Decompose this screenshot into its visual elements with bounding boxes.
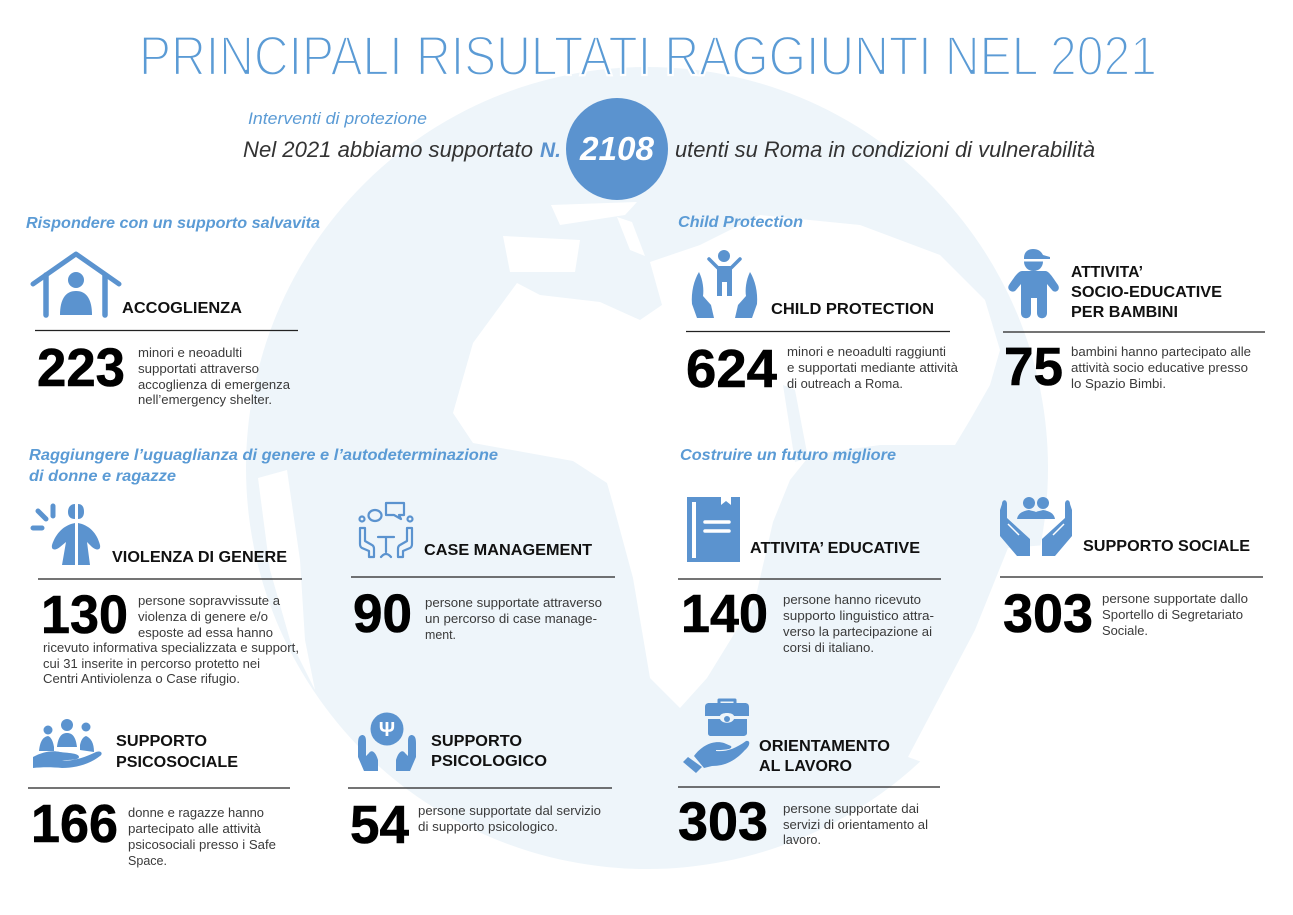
card: attività socio-educative: SOCIO-EDUCATIVE [1071, 284, 1222, 301]
card: violenza di genere [33, 504, 302, 686]
card: case management [351, 503, 615, 644]
headline statement with total: N. [540, 139, 561, 162]
card: accoglienza: accoglienza di emergenza [138, 378, 290, 392]
card: orientamento al lavoro: persone supportate dai [783, 802, 919, 816]
section heading: supporto salvavita: Rispondere con un supporto salvavita [26, 215, 320, 232]
card: orientamento al lavoro: lavoro. [783, 833, 821, 847]
card: accoglienza [33, 254, 298, 407]
card: orientamento al lavoro: servizi di orientamento al [783, 818, 928, 832]
headline statement with total: 2108 [579, 130, 655, 167]
card: attività socio-educative: PER BAMBINI [1071, 304, 1178, 321]
subheading: interventi di protezione: Interventi di protezione [248, 109, 427, 128]
background globe [246, 67, 1048, 869]
card: supporto psicologico: di supporto psicologico. [418, 820, 558, 834]
card: case management: CASE MANAGEMENT [424, 542, 593, 559]
card: supporto psicosociale: donne e ragazze hanno [128, 806, 264, 820]
card: supporto sociale: 303 [1003, 584, 1093, 644]
card: attività educative: ATTIVITA’ EDUCATIVE [750, 540, 920, 557]
headline statement with total: utenti su Roma in condizioni di vulnerabilità [675, 137, 1095, 162]
icon: hands holding child [692, 250, 757, 318]
card: attività socio-educative [1003, 249, 1265, 397]
card: violenza di genere: VIOLENZA DI GENERE [112, 549, 287, 566]
card: child protection: di outreach a Roma. [787, 377, 903, 391]
card: child protection: minori e neoadulti raggiunti [787, 345, 946, 359]
card: attività socio-educative: lo Spazio Bimbi. [1071, 377, 1166, 391]
card: supporto psicologico: persone supportate dal servizio [418, 804, 601, 818]
title: PRINCIPALI RISULTATI RAGGIUNTI NEL 2021 [139, 24, 1157, 87]
card: supporto sociale: persone supportate dallo [1102, 592, 1248, 606]
card: orientamento al lavoro: AL LAVORO [759, 758, 852, 775]
card: supporto psicosociale: PSICOSOCIALE [116, 754, 238, 771]
card: child protection: e supportati mediante attività [787, 361, 958, 375]
card: case management: 90 [353, 584, 412, 644]
icon: house with person [33, 254, 119, 315]
section heading: futuro migliore: Costruire un futuro migliore [680, 447, 896, 464]
icon: hands with psi symbol: Ψ [379, 719, 395, 741]
card: attività educative: persone hanno ricevuto [783, 593, 921, 607]
section heading: uguaglianza di genere: di donne e ragazze [29, 468, 176, 485]
card: supporto psicosociale [28, 719, 290, 868]
card: child protection: 624 [686, 339, 777, 399]
icon: people at a table with speech bubbles [360, 503, 412, 557]
card: attività educative: supporto linguistico attra- [783, 609, 934, 623]
section heading: uguaglianza di genere: Raggiungere l’uguaglianza di genere e l’autodeterminazione [29, 447, 498, 464]
card: supporto psicologico: 54 [350, 795, 409, 855]
icon: book [687, 497, 740, 562]
icon: hands holding people [1000, 497, 1072, 556]
card: accoglienza: ACCOGLIENZA [122, 300, 242, 317]
card: attività educative: corsi di italiano. [783, 641, 874, 655]
card: supporto psicosociale: psicosociali presso i Safe [128, 838, 276, 852]
icon: hand holding briefcase [683, 700, 749, 773]
total circle [566, 98, 668, 200]
card: attività educative: verso la partecipazione ai [783, 625, 932, 639]
card: case management: persone supportate attraverso [425, 596, 602, 610]
card: case management: un percorso di case manage- [425, 612, 597, 626]
card: accoglienza: nell’emergency shelter. [138, 393, 272, 407]
card: violenza di genere: esposte ad essa hanno [138, 626, 273, 640]
card: accoglienza: 223 [37, 338, 125, 398]
icon: figure with impact marks [33, 504, 100, 565]
card: attività socio-educative: bambini hanno partecipato alle [1071, 345, 1251, 359]
card: supporto sociale: Sportello di Segretariato [1102, 608, 1243, 622]
card: supporto psicosociale: 166 [31, 794, 118, 854]
card: case management: ment. [425, 628, 456, 642]
icon: hands with psi symbol [358, 712, 416, 771]
card: violenza di genere: ricevuto informativa specializzata e support, [43, 641, 299, 655]
card: orientamento al lavoro: 303 [678, 792, 768, 852]
icon: hand holding group [33, 719, 102, 768]
icon: child with cap [1008, 249, 1059, 318]
card: violenza di genere: Centri Antiviolenza o Case rifugio. [43, 672, 240, 686]
card: attività educative [678, 497, 941, 655]
card: orientamento al lavoro: ORIENTAMENTO [759, 738, 890, 755]
card: violenza di genere: violenza di genere e/o [138, 610, 268, 624]
card: violenza di genere: 130 [41, 585, 128, 645]
card: child protection [686, 250, 958, 399]
card: attività socio-educative: 75 [1004, 337, 1063, 397]
card: supporto psicosociale: Space. [128, 854, 167, 868]
card: supporto psicosociale: SUPPORTO [116, 733, 207, 750]
card: attività educative: 140 [681, 584, 768, 644]
card: violenza di genere: cui 31 inserite in percorso protetto nei [43, 657, 260, 671]
card: child protection: CHILD PROTECTION [771, 301, 934, 318]
card: orientamento al lavoro [678, 700, 940, 852]
section heading: child protection: Child Protection [678, 214, 803, 231]
card: accoglienza: minori e neoadulti [138, 346, 242, 360]
card: supporto sociale: SUPPORTO SOCIALE [1083, 538, 1250, 555]
card: attività socio-educative: ATTIVITA’ [1071, 264, 1143, 281]
card: supporto sociale [1000, 497, 1263, 644]
headline statement with total: Nel 2021 abbiamo supportato [243, 137, 533, 162]
headline statement with total [243, 98, 1095, 200]
card: supporto psicologico [348, 712, 612, 855]
card: supporto psicologico: SUPPORTO [431, 733, 522, 750]
card: accoglienza: supportati attraverso [138, 362, 259, 376]
card: supporto sociale: Sociale. [1102, 624, 1148, 638]
card: supporto psicosociale: partecipato alle attività [128, 822, 261, 836]
card: violenza di genere: persone sopravvissute a [138, 594, 280, 608]
card: attività socio-educative: attività socio educative presso [1071, 361, 1248, 375]
card: supporto psicologico: PSICOLOGICO [431, 753, 547, 770]
